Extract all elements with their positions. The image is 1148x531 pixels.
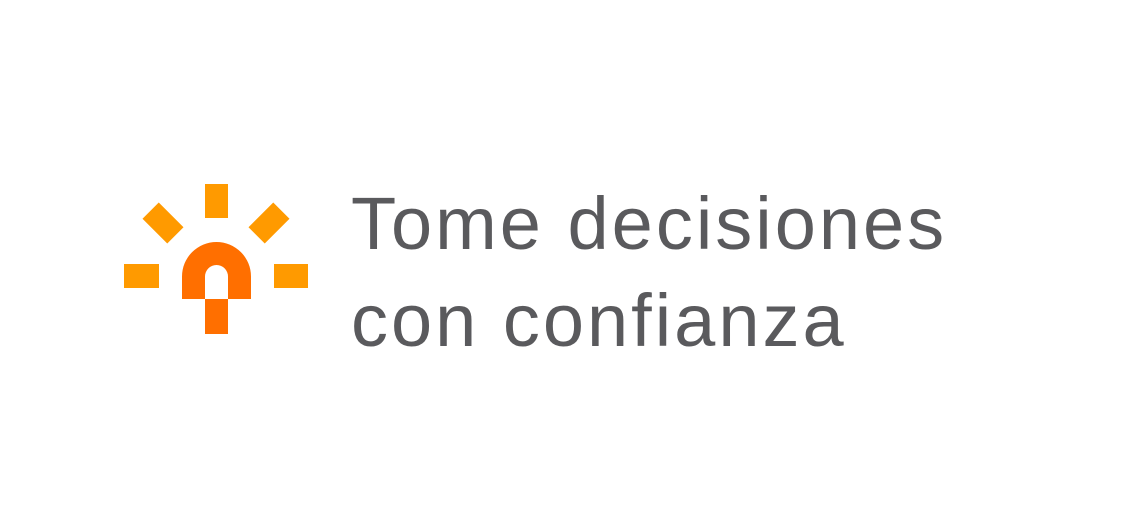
title text: Tome decisiones xyxy=(351,182,947,265)
title text xyxy=(351,182,947,362)
title text: con confianza xyxy=(351,279,847,362)
icon: lightbulb logo xyxy=(124,184,308,334)
